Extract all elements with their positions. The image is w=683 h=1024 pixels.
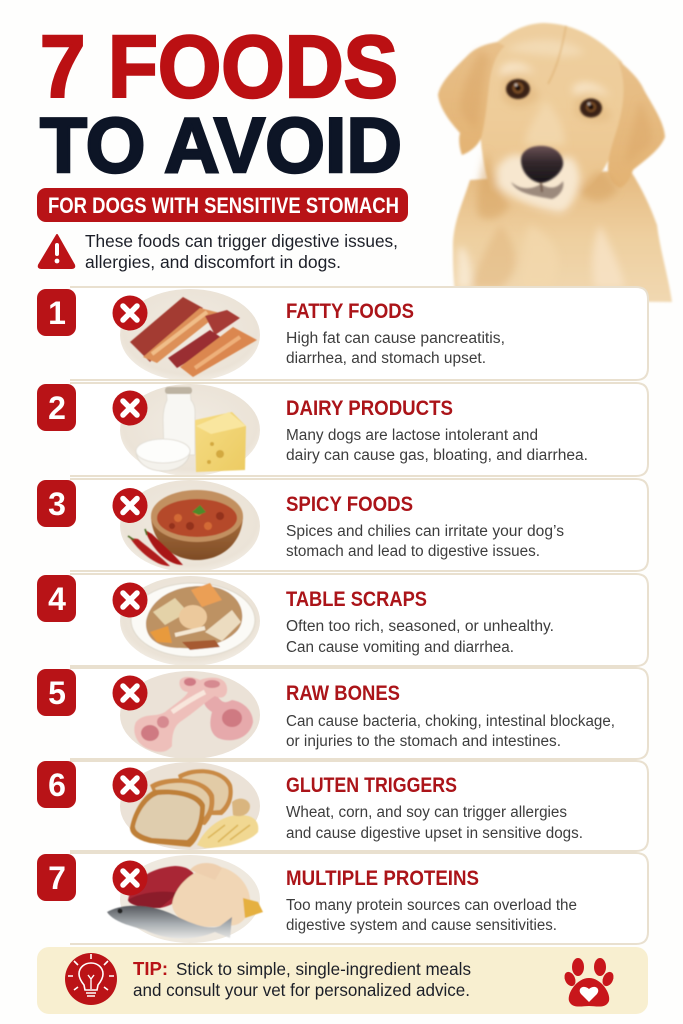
icon: red x (112, 390, 148, 426)
item 1: fatty foods (37, 287, 648, 381)
number badge: 6 (48, 767, 66, 803)
tip text: Stick to simple, single-ingredient meals (176, 959, 471, 979)
tip text: TIP: (133, 959, 168, 979)
warning note (39, 231, 398, 272)
number badge (37, 761, 76, 808)
icon: red x (112, 582, 148, 618)
item 3: spicy foods (37, 479, 648, 572)
item 4: table scraps (37, 574, 648, 666)
panel: tip (37, 947, 648, 1014)
icon: red x (112, 488, 148, 523)
number badge: 1 (48, 295, 66, 331)
food image: plate of scraps (120, 576, 260, 666)
icon: light bulb (65, 953, 117, 1005)
description (286, 427, 588, 464)
food image: beef, chicken and fish (107, 855, 263, 943)
number badge (37, 669, 76, 716)
card (70, 287, 648, 380)
number badge (37, 384, 76, 431)
item 6: gluten triggers (37, 761, 648, 851)
icon: paw with heart (562, 958, 616, 1007)
title: TO AVOID: TO AVOID (40, 101, 402, 189)
warning text (85, 231, 398, 272)
card (70, 668, 648, 759)
heading: RAW BONES (286, 682, 400, 705)
card (70, 383, 648, 476)
description: Too many protein sources can overload the (286, 897, 577, 914)
number badge: 3 (48, 486, 66, 522)
food image: raw bones (120, 671, 260, 759)
card (70, 761, 648, 851)
description (286, 897, 577, 934)
heading: SPICY FOODS (286, 493, 413, 516)
number badge (37, 289, 76, 336)
warning text: These foods can trigger digestive issues, (85, 231, 398, 251)
tip text (133, 959, 471, 1000)
description: Can cause vomiting and diarrhea. (286, 639, 514, 656)
icon: warning triangle (39, 235, 74, 268)
description: dairy can cause gas, bloating, and diarrhea. (286, 447, 588, 464)
description: Many dogs are lactose intolerant and (286, 427, 538, 444)
description (286, 523, 564, 560)
description (286, 804, 583, 842)
food image: bacon (120, 289, 260, 381)
description: diarrhea, and stomach upset. (286, 350, 486, 367)
subtitle banner (37, 188, 408, 222)
dog face (506, 26, 602, 199)
description (286, 713, 615, 750)
description (286, 618, 554, 656)
food image: bread and pasta (120, 762, 260, 850)
photo: golden retriever (438, 23, 672, 302)
heading: MULTIPLE PROTEINS (286, 867, 479, 890)
description: digestive system and cause sensitivities. (286, 917, 557, 934)
tip text: and consult your vet for personalized advice. (133, 980, 470, 1000)
icon: red x (112, 676, 148, 710)
item 5: raw bones (37, 668, 648, 759)
card (70, 853, 648, 944)
icon: red x (112, 296, 148, 330)
title: 7 FOODS: 7 FOODS (40, 17, 398, 116)
description: or injuries to the stomach and intestines. (286, 733, 561, 750)
number badge (37, 480, 76, 527)
icon: red x (112, 768, 148, 802)
description: and cause digestive upset in sensitive dogs. (286, 825, 583, 842)
food image: milk, yogurt and cheese (120, 384, 260, 476)
card (70, 479, 648, 571)
heading: FATTY FOODS (286, 300, 414, 323)
warning text: allergies, and discomfort in dogs. (85, 252, 341, 272)
subtitle banner: FOR DOGS WITH SENSITIVE STOMACH (48, 193, 399, 218)
description: High fat can cause pancreatitis, (286, 330, 505, 347)
dog shading (457, 40, 652, 288)
item 2: dairy products (37, 383, 648, 476)
number badge: 7 (48, 860, 66, 896)
number badge: 5 (48, 675, 66, 711)
description: Wheat, corn, and soy can trigger allergies (286, 804, 567, 821)
food image: chili bowl and peppers (120, 480, 260, 572)
description: Often too rich, seasoned, or unhealthy. (286, 618, 554, 635)
heading: TABLE SCRAPS (286, 588, 427, 611)
icon: red x (112, 860, 148, 896)
card (70, 574, 648, 666)
description: Can cause bacteria, choking, intestinal blockage, (286, 713, 615, 730)
description: Spices and chilies can irritate your dog’s (286, 523, 564, 540)
number badge: 2 (48, 390, 66, 426)
heading: DAIRY PRODUCTS (286, 397, 453, 420)
description: stomach and lead to digestive issues. (286, 543, 540, 560)
number badge (37, 854, 76, 901)
heading: GLUTEN TRIGGERS (286, 774, 457, 797)
number badge: 4 (48, 581, 66, 617)
number badge (37, 575, 76, 622)
item 7: multiple proteins (37, 853, 648, 944)
description (286, 330, 505, 367)
